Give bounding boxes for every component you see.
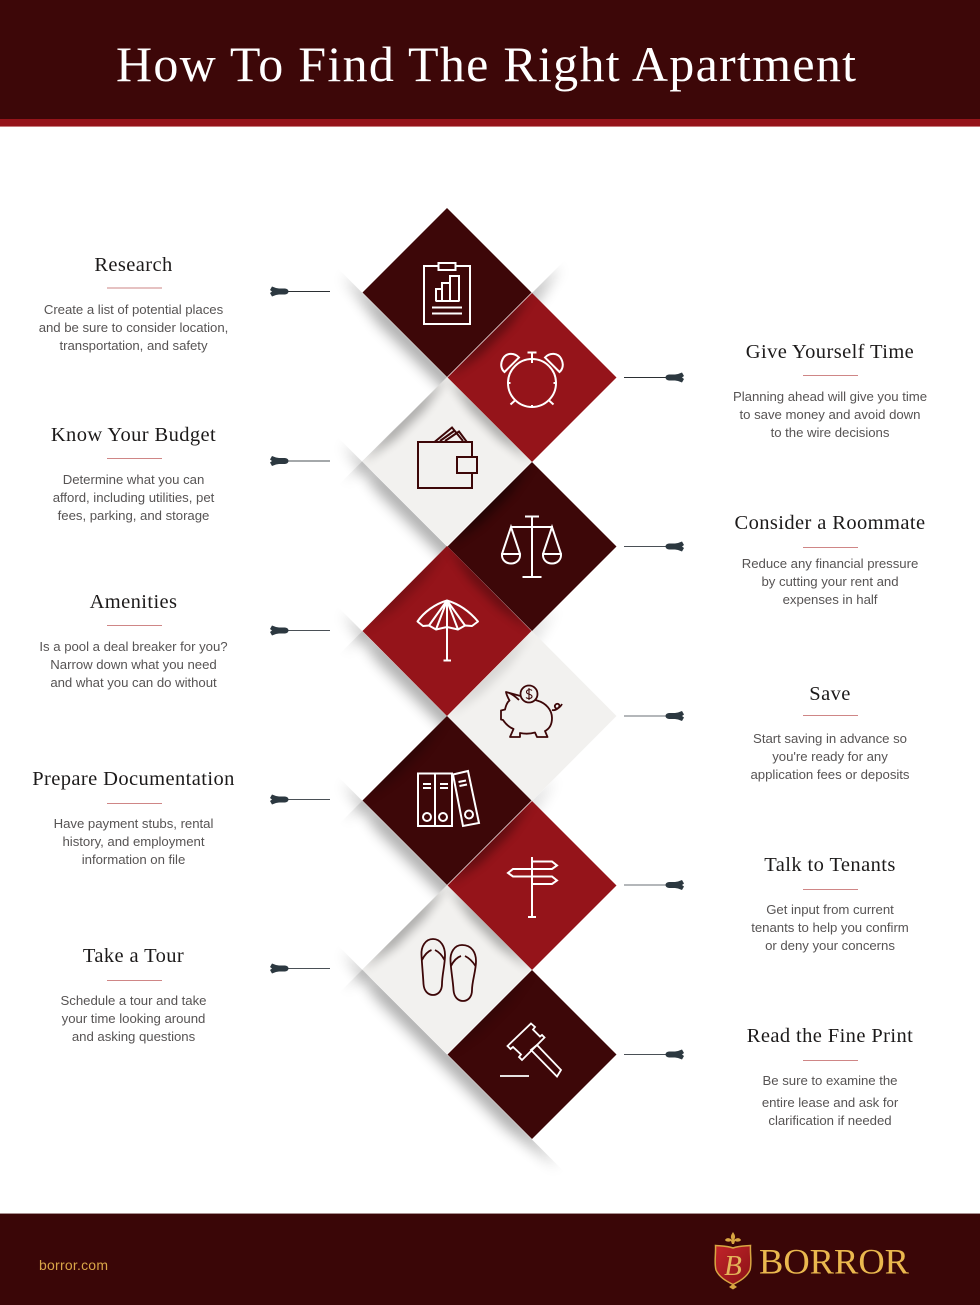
text block: save [750,683,909,782]
footer band [0,1213,980,1305]
text block: know your budget: afford, including utilities, pet [53,490,214,505]
icon: balance scales [502,516,561,577]
text block: save: application fees or deposits [750,767,909,782]
icon: wallet [418,428,477,488]
connector: roommate [624,542,684,552]
text block: know your budget: fees, parking, and storage [58,508,209,523]
diamond: amenities [362,546,532,716]
icon: flip flops [421,939,476,1001]
text block: consider a roommate: expenses in half [783,592,877,607]
text block: prepare documentation: history, and employment [62,834,204,849]
icon: binders [418,771,479,826]
text block: talk to tenants [751,854,909,953]
text block: know your budget: Know Your Budget [51,424,216,446]
logo: borror shield: B [724,1250,742,1282]
text block: research [39,254,228,353]
connector: amenities [270,626,330,636]
text block: take a tour: your time looking around [62,1011,205,1026]
text block: talk to tenants: Get input from current [766,902,894,917]
diamond shadows on white background [336,260,567,1174]
logo: borror wordmark: BORROR [759,1242,909,1282]
text block: read the fine print [747,1025,913,1128]
diamond: take a tour [362,885,532,1054]
footer url: borror.com [39,1257,108,1273]
text block: talk to tenants: Talk to Tenants [764,854,896,876]
connector: budget [270,456,330,466]
connector: save [624,711,684,721]
icon: gavel [500,1024,561,1076]
text block: consider a roommate: Consider a Roommate [735,512,925,534]
text block: take a tour: Schedule a tour and take [61,993,206,1008]
inner fold shadows on diamonds [366,297,530,1031]
text block: know your budget [51,424,216,523]
diamond: prepare documentation [362,716,532,885]
text block: give yourself time: to save money and avoid down [740,407,920,422]
text block: prepare documentation: Prepare Documentation [32,768,235,790]
icon: alarm clock [501,352,563,407]
diamond: give yourself time [448,293,616,462]
text block: consider a roommate: Reduce any financial pressure [742,556,918,571]
diamond: talk to tenants [448,801,616,970]
text block: take a tour: and asking questions [72,1029,195,1044]
diamond: read the fine print [448,970,616,1139]
icon: beach umbrella [418,600,478,660]
text block: take a tour [61,945,206,1044]
text block: amenities: Amenities [90,591,177,613]
icon: clipboard chart [424,263,470,324]
text block: read the fine print: entire lease and ask for [762,1095,898,1110]
text block: read the fine print: Read the Fine Print [747,1025,913,1047]
icon: signpost [508,857,557,917]
diamond: consider a roommate [448,462,616,631]
text block: talk to tenants: tenants to help you confirm [751,920,909,935]
connector: research [270,286,330,296]
text block: prepare documentation: Have payment stubs, rental [54,816,213,831]
text block: save: Save [809,683,851,705]
text block: read the fine print: clarification if needed [768,1113,892,1128]
diamond: know your budget [362,377,532,546]
connector: tenants [624,880,684,890]
text block: consider a roommate: by cutting your rent and [761,574,899,589]
diamond: save [448,631,616,801]
text block: give yourself time [733,341,927,440]
text block: save: Start saving in advance so [753,731,907,746]
text block: amenities: Narrow down what you need [50,657,217,672]
title: How To Find The Right Apartment [116,36,856,92]
text block: read the fine print: Be sure to examine the [763,1073,897,1088]
text block: consider a roommate [735,512,925,607]
text block: know your budget: Determine what you can [63,472,204,487]
connector: time [624,372,684,382]
connector: documentation [270,794,330,804]
connector: fine print [624,1050,684,1060]
text block: research: transportation, and safety [59,338,208,353]
text block: research: and be sure to consider location, [39,320,228,335]
diamond: research [362,208,532,377]
logo: borror shield [715,1232,751,1290]
icon: piggy bank [501,686,562,737]
header band [0,0,980,127]
text block: prepare documentation: information on file [82,852,185,867]
text block: prepare documentation [32,768,235,867]
text block: give yourself time: Planning ahead will give you time [733,389,927,404]
text block: talk to tenants: or deny your concerns [765,938,895,953]
text block: amenities: and what you can do without [50,675,217,690]
text block: save: you're ready for any [772,749,888,764]
text block: give yourself time: Give Yourself Time [746,341,914,363]
text block: research: Create a list of potential places [44,302,223,317]
text block: take a tour: Take a Tour [83,945,184,967]
text block: give yourself time: to the wire decisions [771,425,889,440]
text block: amenities: Is a pool a deal breaker for you? [39,639,228,654]
text block: research: Research [94,254,173,276]
text block: amenities [39,591,228,690]
connector: tour [270,964,330,974]
